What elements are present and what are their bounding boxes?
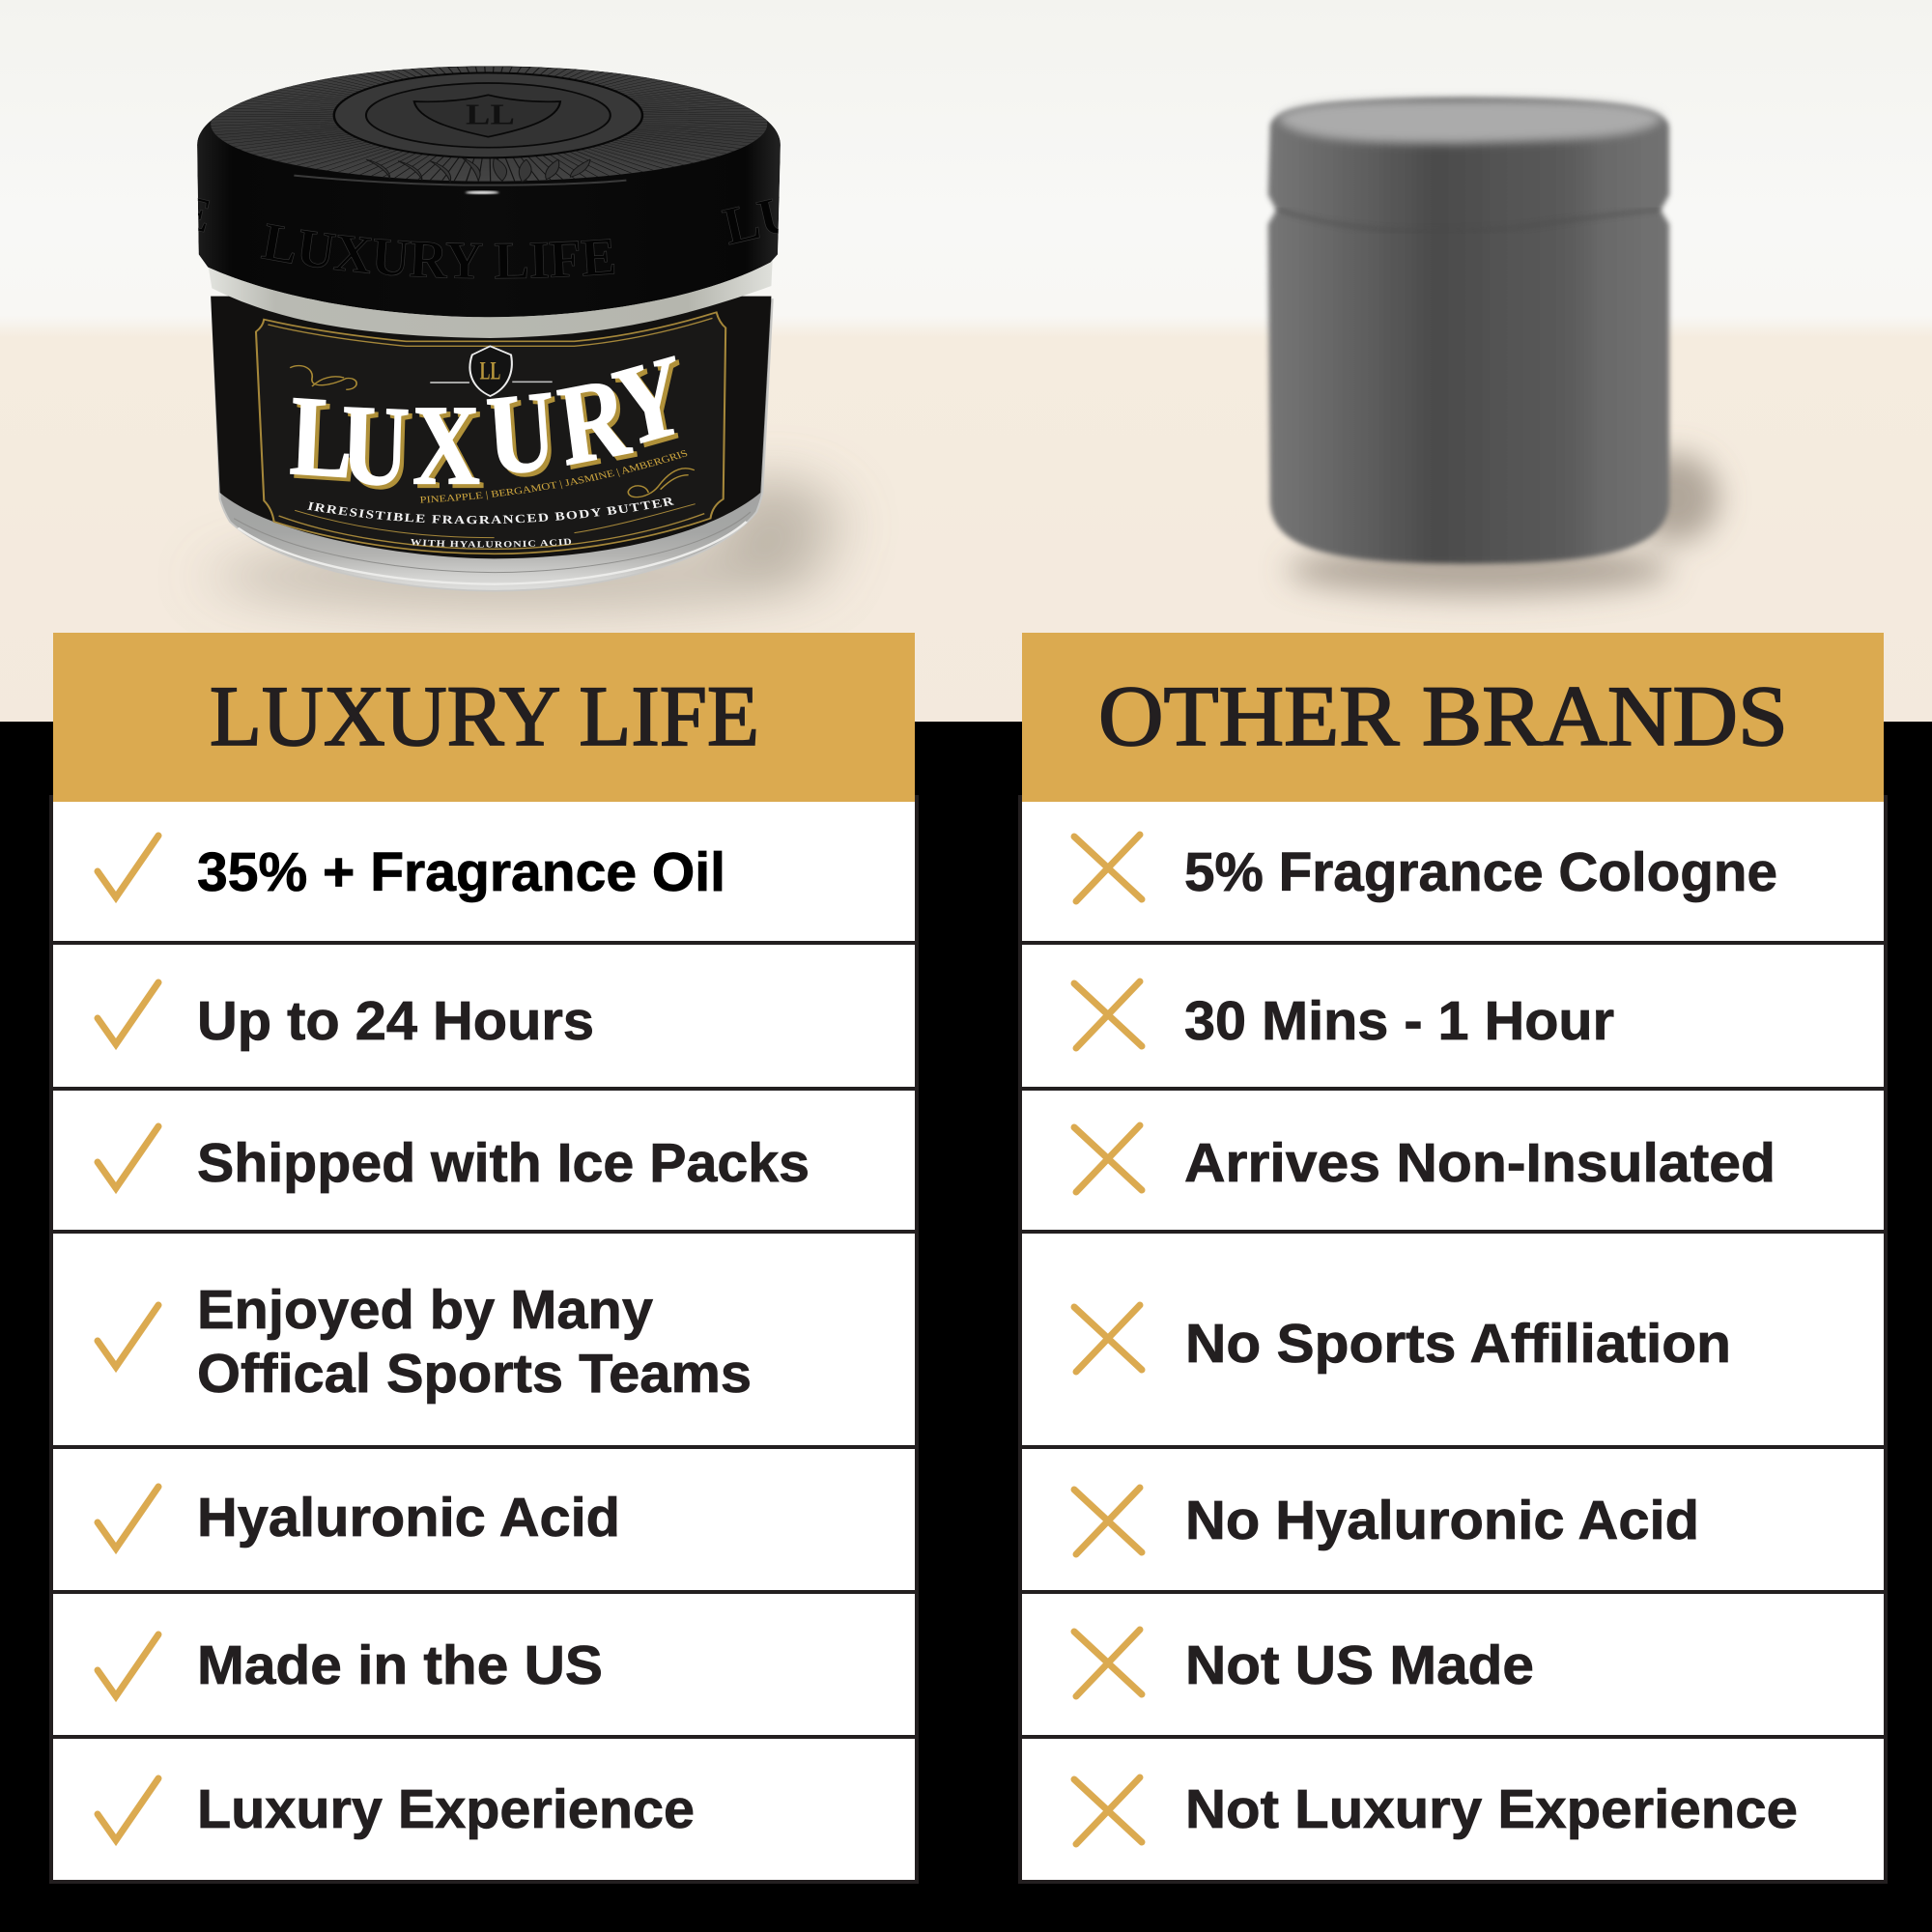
row text: shipping: Shipped with Ice Packs (197, 1132, 810, 1194)
lid top surface (211, 67, 767, 182)
highlight (466, 191, 499, 194)
label body with gold frame (256, 312, 725, 554)
panel: Other Brands column (1020, 633, 1886, 1882)
heading bar (1022, 633, 1884, 802)
embossed text left: E (173, 184, 216, 243)
row text: shipping: Arrives Non-Insulated (1184, 1132, 1776, 1194)
petal pattern (366, 157, 590, 182)
label subline: WITH HYALURONIC ACID (411, 539, 572, 548)
embossed brand text (261, 223, 614, 279)
crest and scroll ornaments: LL (480, 356, 500, 385)
wordmark LUXURY gold shadow: LUXURY (292, 334, 698, 515)
heading: LUXURY LIFE (210, 669, 759, 764)
product photo: blurred other brand jar (1268, 98, 1719, 596)
centre seal (334, 72, 642, 157)
embossed brand text: LUXURY LIFE (261, 223, 614, 279)
lid (197, 66, 781, 317)
centre seal: LL (466, 99, 515, 131)
row text: fragrance: 35% + Fragrance Oil (197, 841, 725, 903)
panel body (51, 797, 917, 1882)
jar silhouette (1268, 98, 1669, 564)
lid rim sheen (294, 176, 626, 185)
row dividers (1022, 941, 1884, 1739)
heading bar (53, 633, 915, 802)
jar lid top (1277, 99, 1662, 144)
row text: origin: Made in the US (197, 1634, 603, 1696)
row text: sports teams: Offical Sports Teams (197, 1343, 752, 1405)
black label wrap (211, 297, 771, 558)
cross icons (1074, 835, 1142, 1844)
cream band (208, 259, 773, 338)
radial lines (265, 62, 713, 170)
row text: acid: No Hyaluronic Acid (1185, 1490, 1699, 1551)
row text: experience: Luxury Experience (197, 1778, 695, 1840)
row text: sports teams (197, 1279, 752, 1405)
row text: duration: 30 Mins - 1 Hour (1184, 990, 1614, 1052)
check icons (98, 836, 158, 1840)
label tagline: IRRESISTIBLE FRAGRANCED BODY BUTTER (307, 497, 674, 524)
jar shadow (213, 476, 835, 611)
jar shadow (1287, 453, 1719, 596)
row text: acid: Hyaluronic Acid (197, 1487, 620, 1548)
row text: fragrance: 5% Fragrance Cologne (1184, 841, 1777, 903)
product photo: Luxury Life jar (197, 66, 860, 633)
scent list: PINEAPPLE | BERGAMOT | JASMINE | AMBERGRIS (419, 450, 688, 503)
row text: duration: Up to 24 Hours (197, 990, 594, 1052)
row text: sports: No Sports Affiliation (1185, 1313, 1731, 1375)
row dividers (53, 941, 915, 1739)
embossed text right: LUXU (718, 164, 877, 256)
heading: OTHER BRANDS (1098, 669, 1788, 764)
row text: sports teams: Enjoyed by Many (197, 1279, 653, 1341)
crest and scroll ornaments (290, 346, 695, 497)
glass rim highlights (234, 512, 751, 584)
wordmark LUXURY white: LUXURY (288, 330, 695, 511)
glass jar body (212, 299, 773, 591)
panel body (1020, 797, 1886, 1882)
row text: origin: Not US Made (1185, 1634, 1534, 1696)
row text: experience: Not Luxury Experience (1185, 1778, 1798, 1840)
panel: Luxury Life column (51, 633, 917, 1882)
lid neck shading (1277, 210, 1660, 232)
